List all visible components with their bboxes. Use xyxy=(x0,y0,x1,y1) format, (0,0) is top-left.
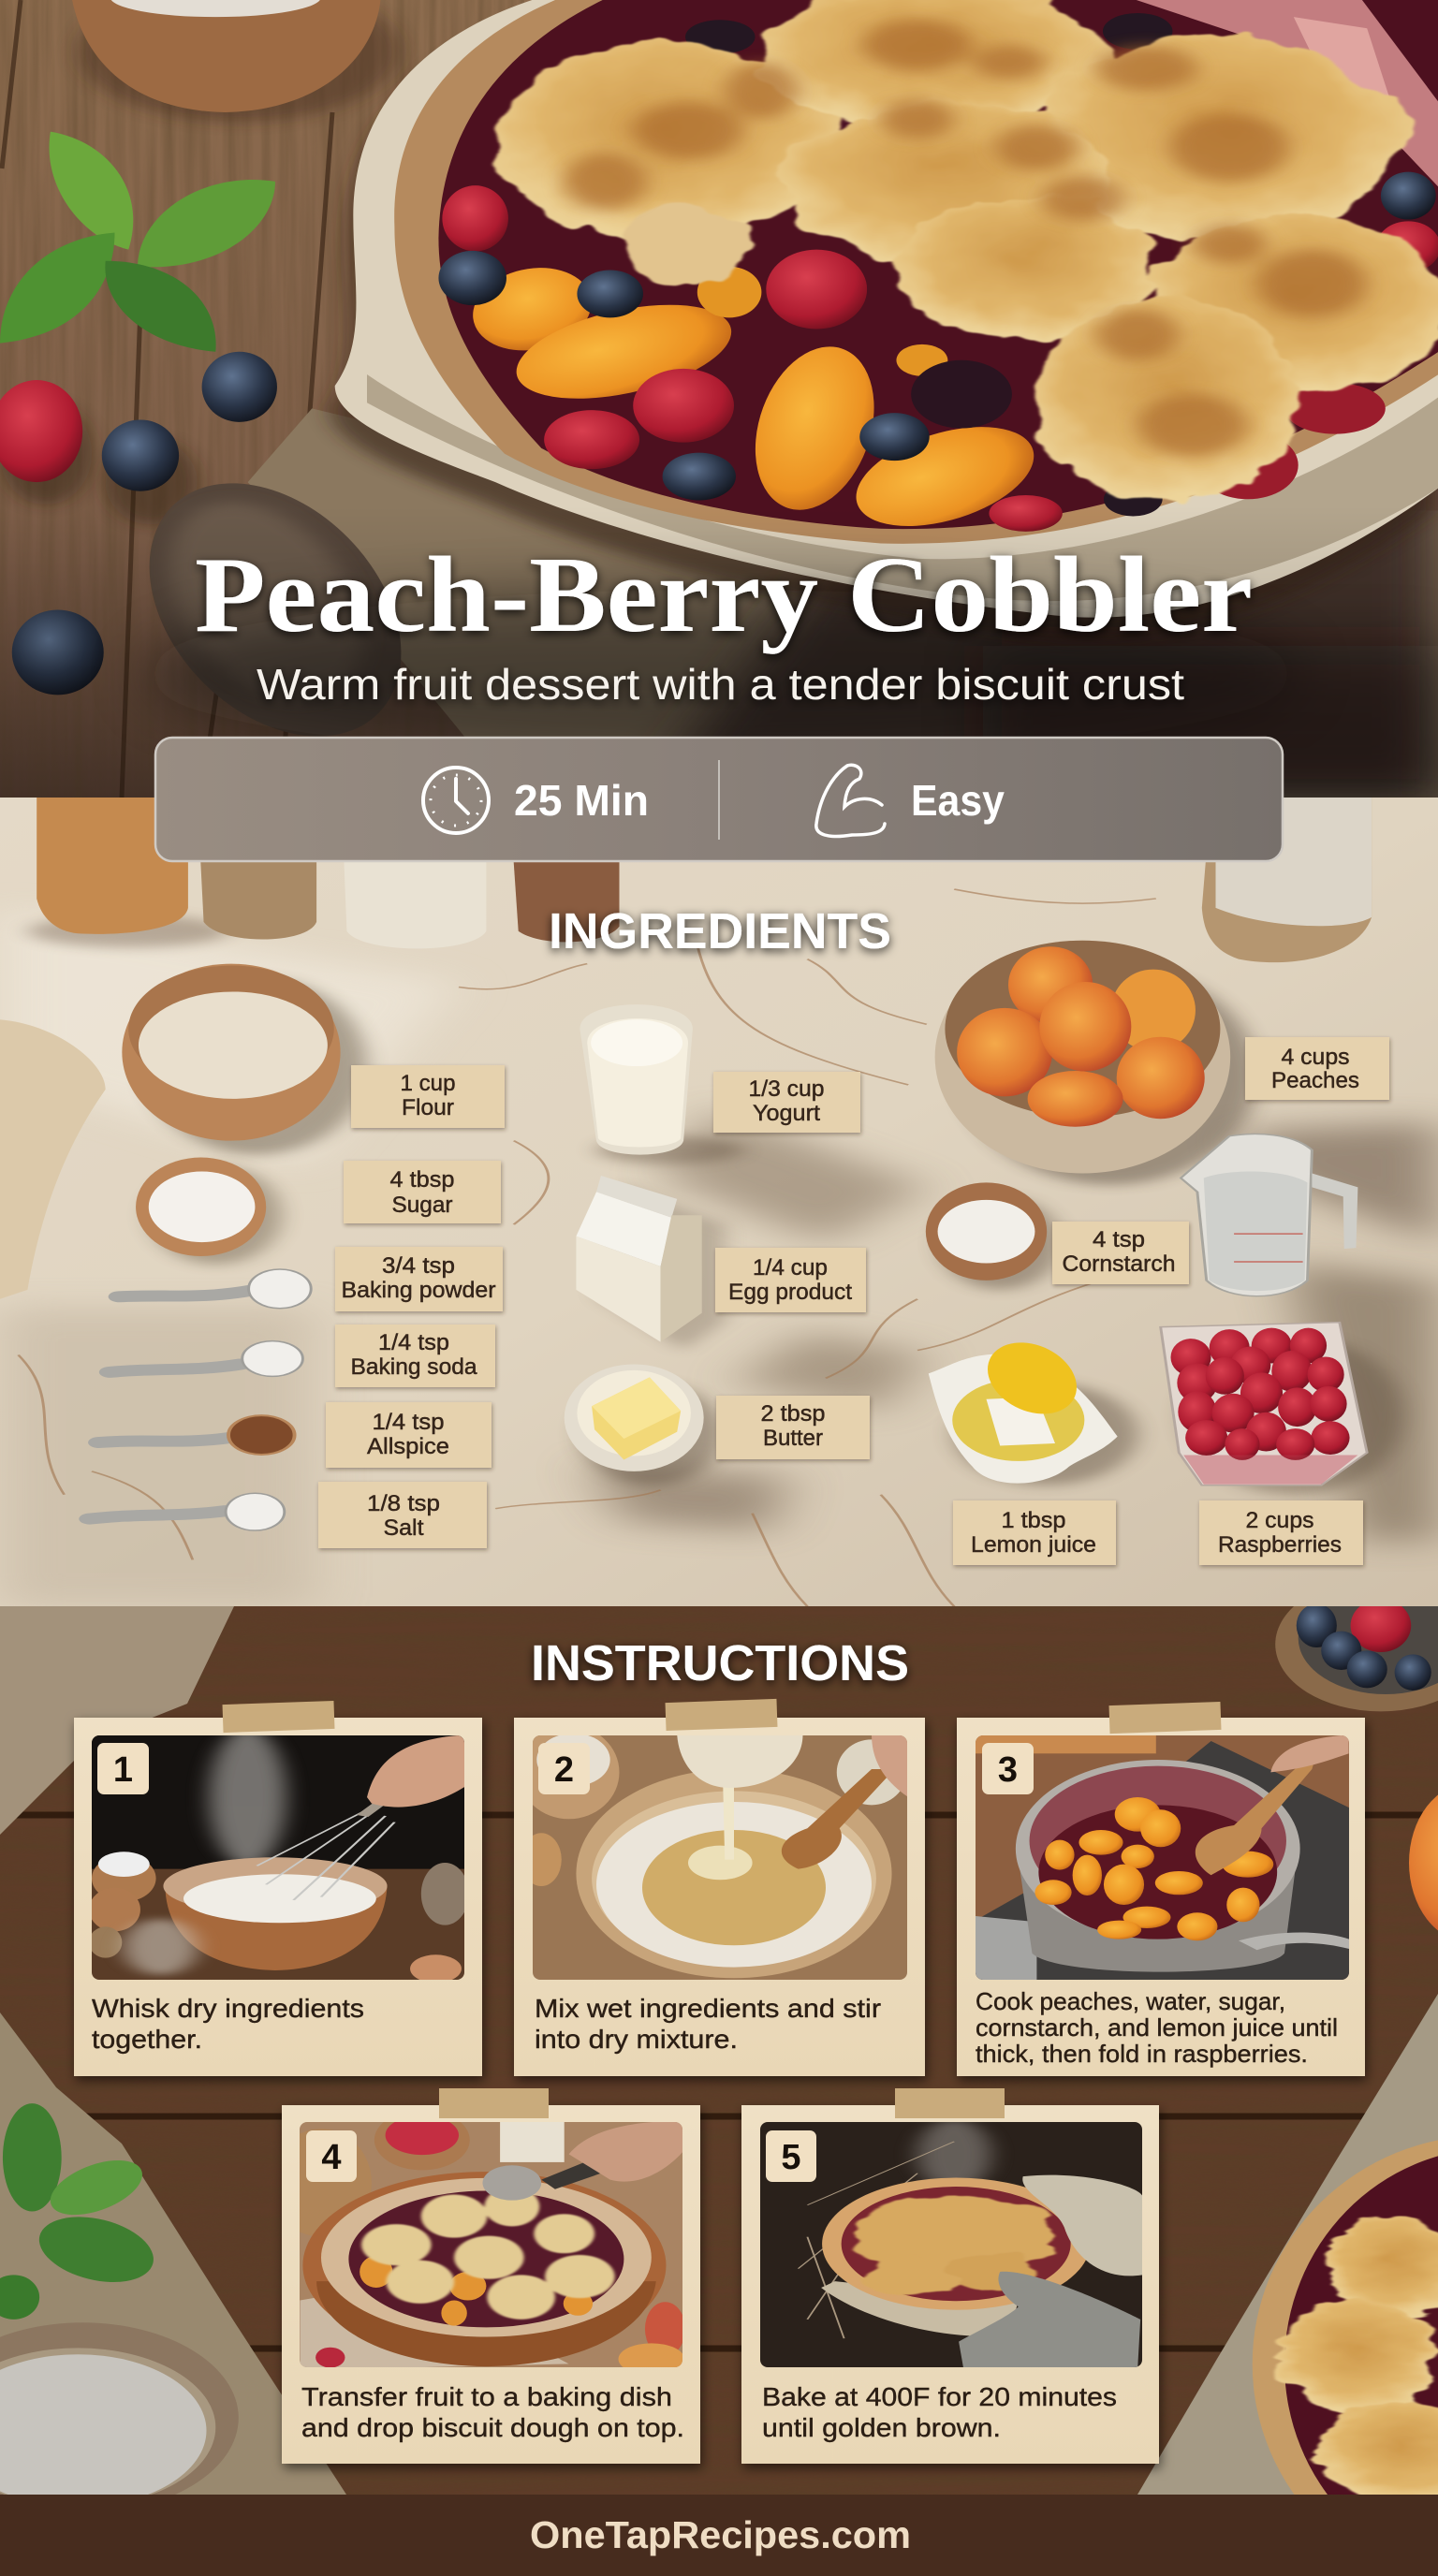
photo: peach slices xyxy=(451,256,1064,547)
measuring jug of water xyxy=(1181,1134,1357,1296)
hero panel xyxy=(0,0,1438,799)
label: salt xyxy=(318,1482,487,1548)
label: yogurt: Yogurt xyxy=(753,1101,820,1126)
label: raspberries: 2 cups xyxy=(1245,1508,1314,1533)
step 2 text: into dry mixture. xyxy=(535,2025,738,2054)
label: allspice: Allspice xyxy=(367,1434,449,1459)
step 5 badge: 5 xyxy=(781,2138,801,2177)
time value: 25 Min xyxy=(514,776,649,825)
step 5 badge xyxy=(766,2130,816,2182)
peach right edge xyxy=(1409,1783,1438,1942)
step 1 text: Whisk dry ingredients xyxy=(92,1994,364,2023)
label: flour: Flour xyxy=(402,1095,454,1120)
label: baking powder: Baking powder xyxy=(341,1278,496,1303)
label: flour: 1 cup xyxy=(401,1071,455,1096)
step 5 text: until golden brown. xyxy=(762,2413,1001,2442)
step 2 badge xyxy=(538,1743,590,1794)
step 2 text xyxy=(535,1994,881,2054)
flour bowl xyxy=(122,964,367,1155)
title: Peach-Berry Cobbler xyxy=(195,535,1253,655)
label: egg product: 1/4 cup xyxy=(753,1255,828,1281)
step 5 photo: baking in oven xyxy=(756,2119,1147,2370)
step 4 badge xyxy=(306,2130,357,2182)
label: baking soda: 1/4 tsp xyxy=(378,1330,449,1355)
peach bowl xyxy=(935,941,1257,1185)
step card 5 xyxy=(741,2088,1159,2464)
label: lemon juice xyxy=(953,1500,1116,1565)
step 2 badge: 2 xyxy=(554,1750,574,1790)
label: raspberries xyxy=(1199,1500,1363,1565)
label: baking powder: 3/4 tsp xyxy=(382,1253,455,1279)
butter dish xyxy=(565,1364,723,1486)
label: cornstarch xyxy=(1052,1222,1189,1284)
step 1 photo: whisking flour xyxy=(89,1729,469,1983)
raspberry punnet xyxy=(1161,1323,1403,1495)
blueberry bowl top right xyxy=(1275,1577,1438,1711)
label: sugar: 4 tbsp xyxy=(389,1167,455,1193)
photo: biscuit topping xyxy=(495,0,1438,499)
label: salt: 1/8 tsp xyxy=(367,1491,440,1516)
label: lemon juice: Lemon juice xyxy=(971,1532,1096,1558)
sugar bowl lower left xyxy=(0,2322,239,2513)
step card 3 xyxy=(957,1702,1365,2076)
step 3 photo: cooking fruit xyxy=(973,1734,1354,1982)
step 2 text: Mix wet ingredients and stir xyxy=(535,1994,881,2023)
step 3 text: thick, then fold in raspberries. xyxy=(976,2040,1308,2068)
linen cloth left top xyxy=(0,1606,234,1835)
label: baking soda xyxy=(335,1325,495,1387)
step 4 text: Transfer fruit to a baking dish xyxy=(301,2382,672,2411)
linen cloth lower right xyxy=(1137,1994,1438,2495)
photo: scattered berries xyxy=(0,352,277,695)
counter jars xyxy=(27,796,1372,962)
label: yogurt: 1/3 cup xyxy=(749,1076,824,1102)
step 1 badge: 1 xyxy=(113,1750,133,1790)
step 3 badge: 3 xyxy=(998,1750,1018,1790)
icon: flexed arm xyxy=(816,765,885,837)
step 2 photo: mixing dough xyxy=(519,1725,913,1982)
instructions heading: INSTRUCTIONS xyxy=(531,1635,909,1691)
label: butter xyxy=(716,1396,870,1459)
instructions panel background xyxy=(0,1577,1438,2576)
label: allspice: 1/4 tsp xyxy=(373,1410,444,1435)
photo: wooden bowl xyxy=(71,0,399,122)
step 3 text: cornstarch, and lemon juice until xyxy=(976,2013,1338,2042)
icon: clock xyxy=(423,768,489,833)
step 5 text xyxy=(762,2382,1117,2442)
difficulty value: Easy xyxy=(911,776,1005,825)
label: peaches: Peaches xyxy=(1271,1068,1359,1093)
footer text: OneTapRecipes.com xyxy=(530,2513,911,2556)
label: flour xyxy=(351,1065,505,1128)
label: baking soda: Baking soda xyxy=(350,1354,477,1380)
label: cornstarch: Cornstarch xyxy=(1062,1251,1176,1277)
step 4 photo: adding biscuit dough xyxy=(271,2110,688,2375)
label: yogurt xyxy=(713,1072,860,1133)
photo: mint sprig xyxy=(0,132,275,352)
step 1 badge xyxy=(97,1743,149,1794)
step 4 badge: 4 xyxy=(321,2138,342,2177)
photo: berries in filling xyxy=(438,13,1438,532)
label: egg product xyxy=(715,1248,866,1312)
linen cloth lower left xyxy=(0,2012,346,2495)
photo: cobbler dish xyxy=(330,0,1438,640)
label: egg product: Egg product xyxy=(728,1280,852,1305)
label: peaches xyxy=(1245,1037,1389,1100)
lemon juicer xyxy=(929,1338,1137,1486)
measuring spoons xyxy=(90,1269,311,1530)
label: sugar xyxy=(344,1161,501,1223)
ingredients panel xyxy=(0,796,1438,1606)
label: baking powder xyxy=(335,1247,503,1311)
stats bar xyxy=(155,738,1283,861)
label: cornstarch: 4 tsp xyxy=(1093,1227,1145,1252)
label: peaches: 4 cups xyxy=(1281,1045,1350,1070)
label: lemon juice: 1 tbsp xyxy=(1002,1508,1065,1533)
label: allspice xyxy=(326,1402,492,1468)
cornstarch bowl xyxy=(926,1182,1061,1290)
label: butter: 2 tbsp xyxy=(760,1401,826,1427)
marble lighting and shadows xyxy=(0,908,1438,1606)
yogurt glass xyxy=(580,1004,743,1164)
label: raspberries: Raspberries xyxy=(1218,1532,1342,1558)
label: salt: Salt xyxy=(384,1515,424,1541)
step card 1 xyxy=(74,1701,482,2076)
step card 2 xyxy=(514,1699,925,2076)
photo: napkin under dish xyxy=(248,408,1438,799)
step 3 text: Cook peaches, water, sugar, xyxy=(976,1987,1285,2015)
photo: serving spoon xyxy=(150,483,401,736)
marble veins xyxy=(19,889,1156,1606)
footer band xyxy=(0,2495,1438,2576)
step 3 text xyxy=(976,1987,1338,2068)
step 4 text: and drop biscuit dough on top. xyxy=(301,2413,684,2442)
cloth xyxy=(0,1019,106,1299)
egg product carton xyxy=(576,1176,725,1351)
label: sugar: Sugar xyxy=(391,1193,453,1218)
step 1 text: together. xyxy=(92,2025,202,2054)
baked cobbler lower right xyxy=(1253,2135,1438,2576)
subtitle: Warm fruit dessert with a tender biscuit crust xyxy=(257,660,1184,709)
label: butter: Butter xyxy=(763,1426,823,1451)
step 4 text xyxy=(301,2382,684,2442)
step 3 badge xyxy=(982,1743,1034,1794)
ingredients heading: INGREDIENTS xyxy=(549,903,891,959)
sugar bowl xyxy=(136,1158,282,1265)
step 5 text: Bake at 400F for 20 minutes xyxy=(762,2382,1117,2411)
step 1 text xyxy=(92,1994,364,2054)
step card 4 xyxy=(271,2088,700,2464)
mint sprig lower left xyxy=(0,2103,172,2320)
